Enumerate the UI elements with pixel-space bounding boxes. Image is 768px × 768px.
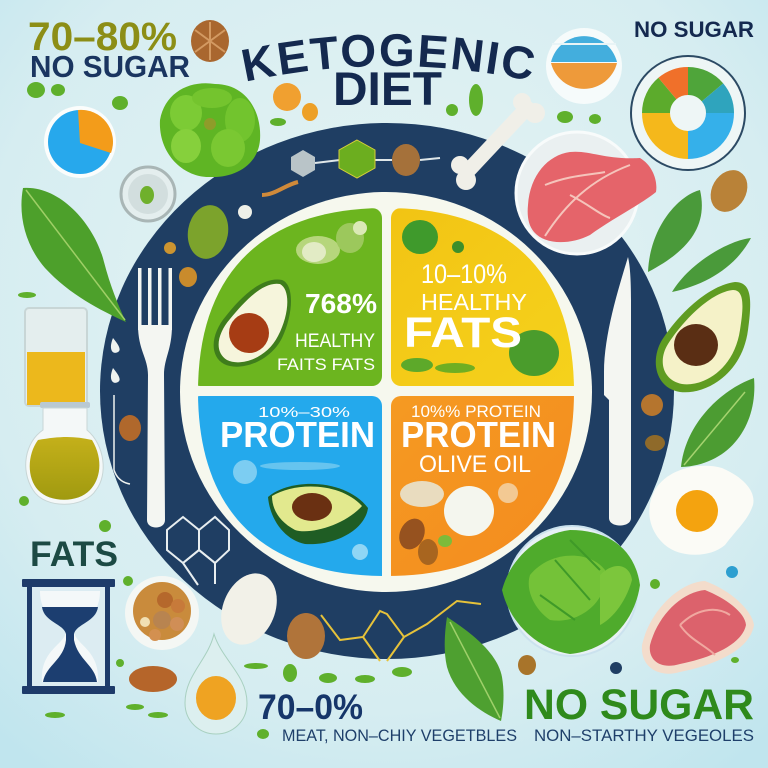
panel: healthy fats yellow	[391, 208, 583, 386]
icon: lower leaf	[445, 617, 504, 721]
icon: orange balls	[273, 83, 318, 121]
icon: layered circle top right	[546, 28, 622, 104]
text: orange quadrant: 10%% PROTEIN	[411, 402, 541, 421]
icon: small nuts on ring	[164, 182, 298, 287]
icon: gauge top right	[631, 56, 745, 170]
panel: protein blue	[190, 396, 382, 586]
text: yellow quadrant: 10–10%	[421, 259, 507, 289]
icon: large leaf left	[21, 188, 126, 322]
icon: green pepper	[160, 83, 260, 177]
icon: avocado on green quadrant	[214, 280, 291, 367]
icon: raw meat	[642, 581, 754, 674]
bottom left label: 70–0%	[258, 688, 363, 727]
icon: avocado on blue quadrant	[268, 484, 368, 544]
icon: small avocado left	[184, 202, 232, 262]
title: DIET	[333, 62, 442, 115]
text: green quadrant: FAITS FATS	[277, 355, 375, 374]
icon: avocado right	[656, 282, 750, 392]
text: green quadrant	[277, 288, 377, 374]
icon: leaf lower right	[681, 378, 754, 467]
icon: hazelnut	[287, 613, 325, 659]
icon: almond right	[703, 163, 755, 219]
heading: top-left percent	[28, 15, 190, 84]
text: orange quadrant: PROTEIN	[401, 414, 556, 455]
icon: small lower nut	[518, 566, 738, 675]
heading: top-right no sugar: NO SUGAR	[634, 17, 754, 42]
text: yellow quadrant: HEALTHY	[421, 289, 527, 315]
icon: molecule lower left	[167, 517, 229, 585]
text: green quadrant: HEALTHY	[295, 331, 375, 352]
bottom right label: NON–STARTHY VEGEOLES	[534, 726, 754, 745]
icon: fried egg	[649, 466, 753, 555]
bottom left label	[258, 688, 517, 745]
panel: healthy fats green	[190, 208, 382, 386]
text: green quadrant: 768%	[305, 288, 377, 319]
panel: plate quadrants	[190, 208, 583, 586]
bottom right label: NO SUGAR	[524, 681, 754, 729]
text: orange quadrant	[401, 402, 556, 478]
heading: fats: FATS	[30, 535, 118, 574]
icon: steak on plate top right	[516, 132, 656, 254]
text: yellow quadrant	[404, 259, 527, 357]
icon: almond lower	[129, 666, 177, 692]
icon: molecule bottom	[321, 601, 481, 661]
icon: glass circle	[121, 167, 175, 221]
text: blue quadrant: 10%–30%	[258, 404, 350, 421]
icon: nuts bowl	[125, 576, 199, 650]
icon: pie chart top-left	[44, 106, 116, 178]
text: blue quadrant: PROTEIN	[220, 414, 375, 455]
icon: ring decorations	[111, 338, 665, 484]
dark plate backdrop	[100, 123, 674, 659]
title	[242, 34, 534, 115]
icon: nut top	[191, 20, 229, 62]
heading: top-left percent: 70–80%	[28, 15, 177, 59]
icon: bone	[451, 93, 545, 190]
panel: protein orange	[391, 396, 583, 586]
icon: knife	[604, 257, 631, 526]
icon: oil drop	[185, 634, 247, 734]
icon: fork	[138, 268, 172, 528]
text: yellow quadrant: FATS	[404, 309, 522, 357]
icon: oil flask	[26, 408, 103, 504]
icon: oil jar	[25, 308, 90, 408]
icon: spinach bowl	[502, 526, 640, 656]
icon: egg	[211, 565, 287, 653]
icon: hourglass	[22, 579, 115, 694]
bottom left label: MEAT, NON–CHIY VEGETBLES	[282, 726, 517, 745]
heading: top-left percent: NO SUGAR	[30, 49, 190, 84]
icon: molecule and almond top	[291, 140, 440, 178]
white plate	[180, 192, 592, 592]
text: orange quadrant: OLIVE OIL	[419, 451, 531, 478]
title: KETOGENIC	[242, 34, 534, 82]
icon: leaves right	[648, 190, 751, 292]
